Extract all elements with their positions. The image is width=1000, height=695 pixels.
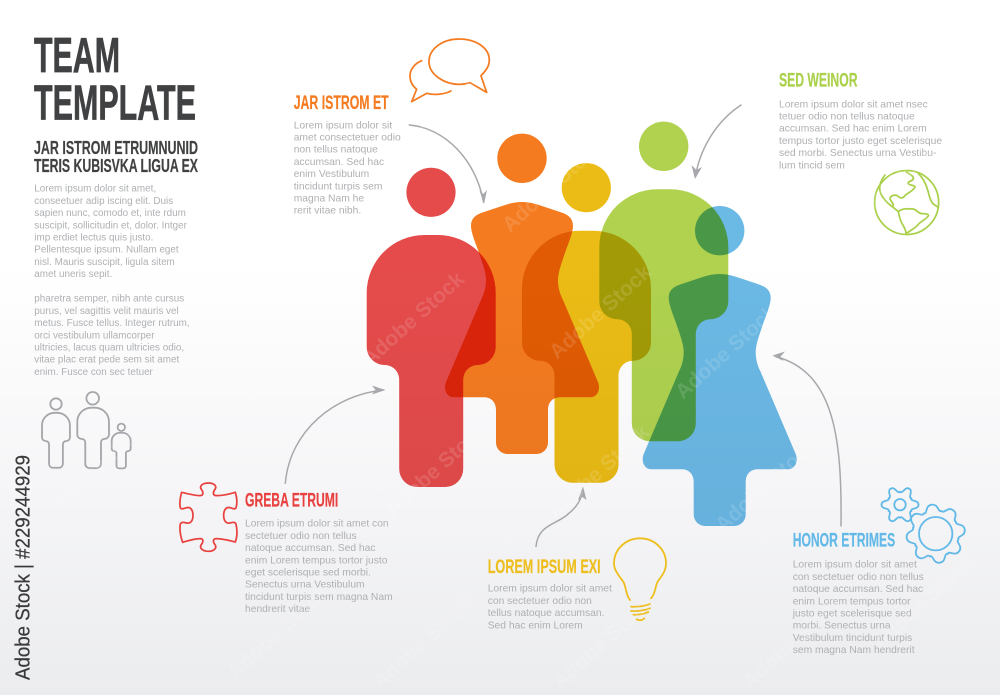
intro text block: conseetuer adip iscing elit. Duis — [34, 196, 173, 207]
intro text block: suscipit, sollicitudin et, dolor. Intger — [34, 220, 188, 231]
watermarks: Adobe Stock — [828, 141, 939, 244]
figure: yellow man — [522, 163, 651, 483]
text: red: tincidunt turpis sem magna Nam — [245, 592, 393, 603]
intro text block: nisl. Mauris suscipit, ligula sitem — [34, 257, 175, 268]
icon: puzzle piece — [180, 483, 237, 551]
heading: green: SED WEINOR — [779, 70, 858, 92]
watermarks: Adobe Stock — [688, 96, 799, 199]
text: blue: natoque accumsan. Sed hac — [793, 584, 923, 595]
text: yellow: Lorem ipsum dolor sit amet — [488, 584, 612, 595]
text: green: sed morbi. Senectus urna Vestibu- — [779, 148, 936, 159]
watermarks: Adobe Stock — [373, 71, 484, 174]
watermarks: Adobe Stock — [498, 134, 609, 237]
heading: red: GREBA ETRUMI — [245, 490, 338, 512]
text: yellow: tellus natoque accumsan. — [488, 608, 604, 619]
watermarks: Adobe Stock — [223, 581, 334, 684]
watermarks: Adobe Stock — [381, 418, 492, 521]
watermarks: Adobe Stock — [545, 261, 656, 364]
text: orange: magna Nam he — [294, 194, 364, 204]
watermarks: Adobe Stock — [671, 301, 782, 404]
panel: red callout — [180, 483, 396, 615]
figure: red man — [367, 168, 496, 487]
watermarks: Adobe Stock — [711, 434, 822, 537]
watermarks: Adobe Stock — [548, 591, 659, 694]
watermarks: Adobe Stock — [368, 591, 479, 694]
text: orange: accumsan. Sed hac — [294, 157, 384, 168]
text: red: hendrerit vitae — [245, 604, 311, 615]
intro text block: metus. Fusce tellus. Integer rutrum, — [34, 318, 190, 329]
intro text block: imp erdiet lectus quis justo. — [34, 232, 153, 244]
watermarks: Adobe Stock — [868, 551, 979, 654]
text: blue: enim Lorem tempus tortor — [793, 596, 911, 607]
intro text block: Pellentesque ipsum. Nullam eget — [34, 245, 179, 256]
icon: globe — [875, 170, 939, 234]
text: green: tempus tortor justo eget scelerisque — [779, 136, 942, 147]
text: green: accumsan. Sed hac enim Lorem — [779, 124, 927, 135]
icon: speech bubbles — [410, 39, 489, 102]
figure: orange woman — [445, 134, 599, 454]
subtitle — [34, 138, 198, 176]
watermark id vertical: Adobe Stock | #229244929 — [12, 455, 34, 680]
figure: blue woman — [643, 206, 797, 526]
intro text block: enim. Fusce con sec tetuer — [34, 367, 154, 378]
text: red: natoque accumsan. Sed hac — [245, 543, 376, 554]
text: blue: con sectetuer odio non tellus — [793, 572, 924, 583]
arrow: yellow callout — [536, 486, 586, 546]
heading: orange: JAR ISTROM ET — [294, 92, 389, 114]
subtitle: JAR ISTROM ETRUMNUNID — [34, 138, 198, 158]
intro text block: ultricies, lacus quam ultricies odio, — [34, 342, 184, 354]
text: orange: Lorem ipsum dolor sit — [294, 120, 392, 131]
text: blue: morbi. Senectus urna — [793, 621, 891, 632]
heading: yellow: LOREM IPSUM EXI — [488, 556, 601, 578]
text: red: Lorem ipsum dolor sit amet con — [245, 519, 389, 530]
panel: green callout — [779, 70, 945, 234]
icon: family outline — [42, 392, 131, 468]
intro text block: Lorem ipsum dolor sit amet, — [34, 184, 156, 195]
text: orange: non tellus natoque — [294, 145, 378, 156]
panel: orange callout — [294, 39, 489, 217]
panel: yellow callout — [488, 538, 666, 631]
title: TEAM — [34, 29, 120, 83]
text: red: eget scelerisque sed morbi. — [245, 568, 371, 578]
watermarks: Adobe Stock — [358, 268, 469, 371]
text: green: tetuer odio non tellus natoque — [779, 112, 915, 122]
watermarks: Adobe Stock — [878, 271, 989, 374]
text: red: enim Lorem tempus tortor justo — [245, 555, 388, 566]
title — [34, 29, 196, 130]
arrow: orange callout — [409, 125, 487, 204]
icon: gears — [874, 479, 969, 567]
text: orange: enim Vestibulum — [294, 169, 369, 180]
watermarks: Adobe Stock — [48, 411, 159, 514]
heading: blue: HONOR ETRIMES — [793, 530, 895, 552]
text: blue: justo eget scelerisque sed — [792, 608, 912, 620]
text: orange: rerit vitae nibh. — [294, 206, 361, 217]
text: blue: Vestibulum tincidunt turpis — [793, 633, 912, 644]
arrow: blue callout — [772, 352, 841, 526]
text: green: lum tincid sem — [779, 160, 845, 171]
text: red: Senectus urna Vestibulum — [245, 580, 365, 591]
text: blue: Lorem ipsum dolor sit amet — [793, 560, 917, 571]
arrow: red callout — [285, 386, 386, 483]
subtitle: TERIS KUBISVKA LIGUA EX — [34, 156, 198, 176]
watermarks: Adobe Stock — [543, 421, 654, 524]
watermarks: Adobe Stock — [738, 591, 849, 694]
team figures — [367, 122, 797, 526]
text: green: Lorem ipsum dolor sit amet nsec — [779, 99, 928, 110]
text: yellow: con sectetuer odio non — [488, 596, 592, 607]
panel: blue callout — [792, 479, 969, 656]
intro text block: vitae plac erat pede sem sit amet — [34, 355, 179, 366]
intro text block: purus, vel sagittis velit mauris vel — [34, 306, 179, 317]
text: blue: sem magna Nam hendrerit — [793, 645, 915, 656]
text: red: sectetuer odio non tellus — [245, 531, 357, 542]
icon: light bulb — [614, 538, 666, 620]
intro text block: amet uneris sepit. — [34, 269, 112, 280]
intro text block: orci vestibulum ullamcorper — [34, 330, 155, 341]
text: orange: amet consectetuer odio — [294, 132, 401, 144]
arrow: green callout — [692, 105, 741, 179]
watermarks: Adobe Stock — [213, 251, 324, 354]
text: orange: tincidunt turpis sem — [294, 181, 382, 192]
intro text block: sapien nunc, comodo et, inte rdum — [34, 208, 186, 219]
title: TEMPLATE — [34, 76, 196, 130]
intro text block: pharetra semper, nibh ante cursus — [34, 294, 184, 305]
figure: green man — [599, 122, 728, 441]
text: yellow: Sed hac enim Lorem — [488, 620, 583, 631]
